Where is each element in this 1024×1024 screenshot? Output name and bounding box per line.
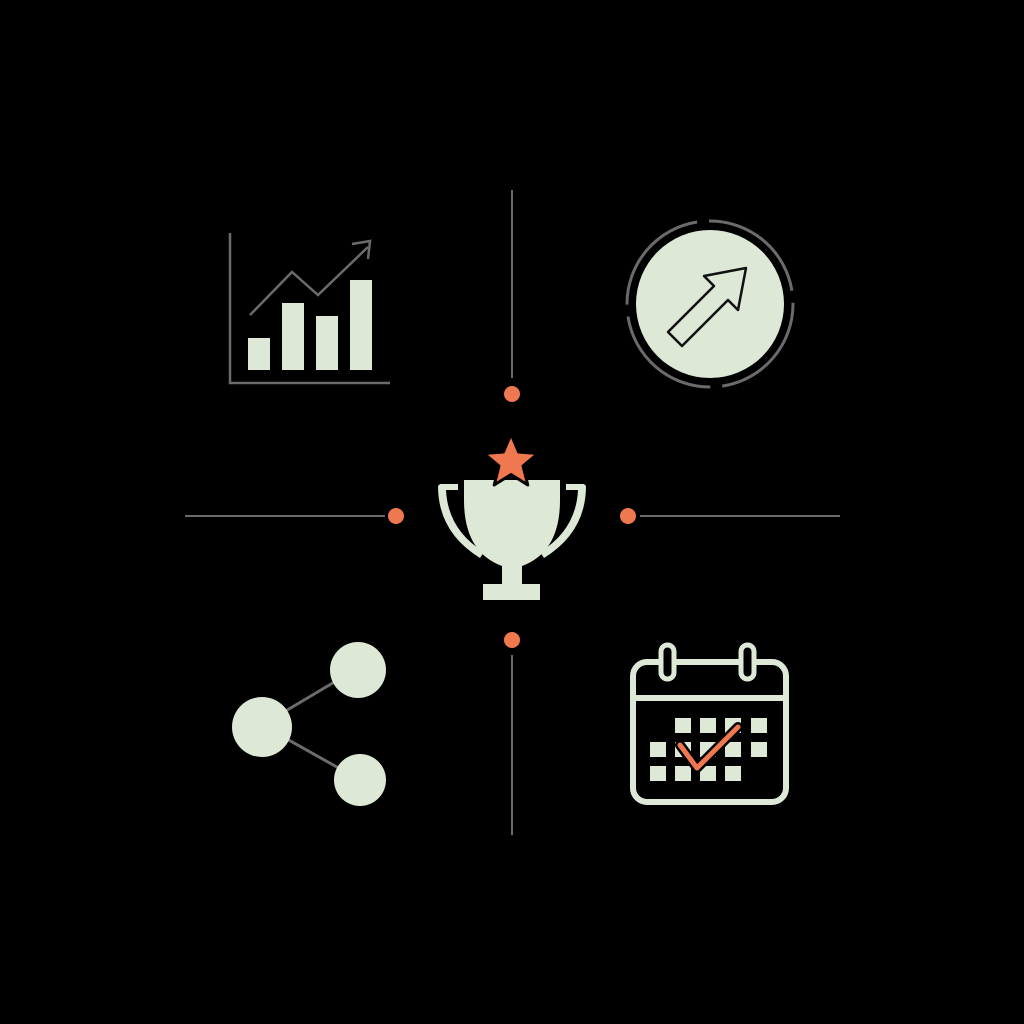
icon: circle arrow [627,221,793,387]
icon: bar chart [230,233,390,383]
icon: trophy [438,434,586,600]
check mark [680,727,738,768]
connector lines [185,190,840,835]
icon: calendar [633,645,786,802]
icon: share nodes [232,642,386,806]
icon: star [484,434,538,485]
connector dots [388,386,636,648]
